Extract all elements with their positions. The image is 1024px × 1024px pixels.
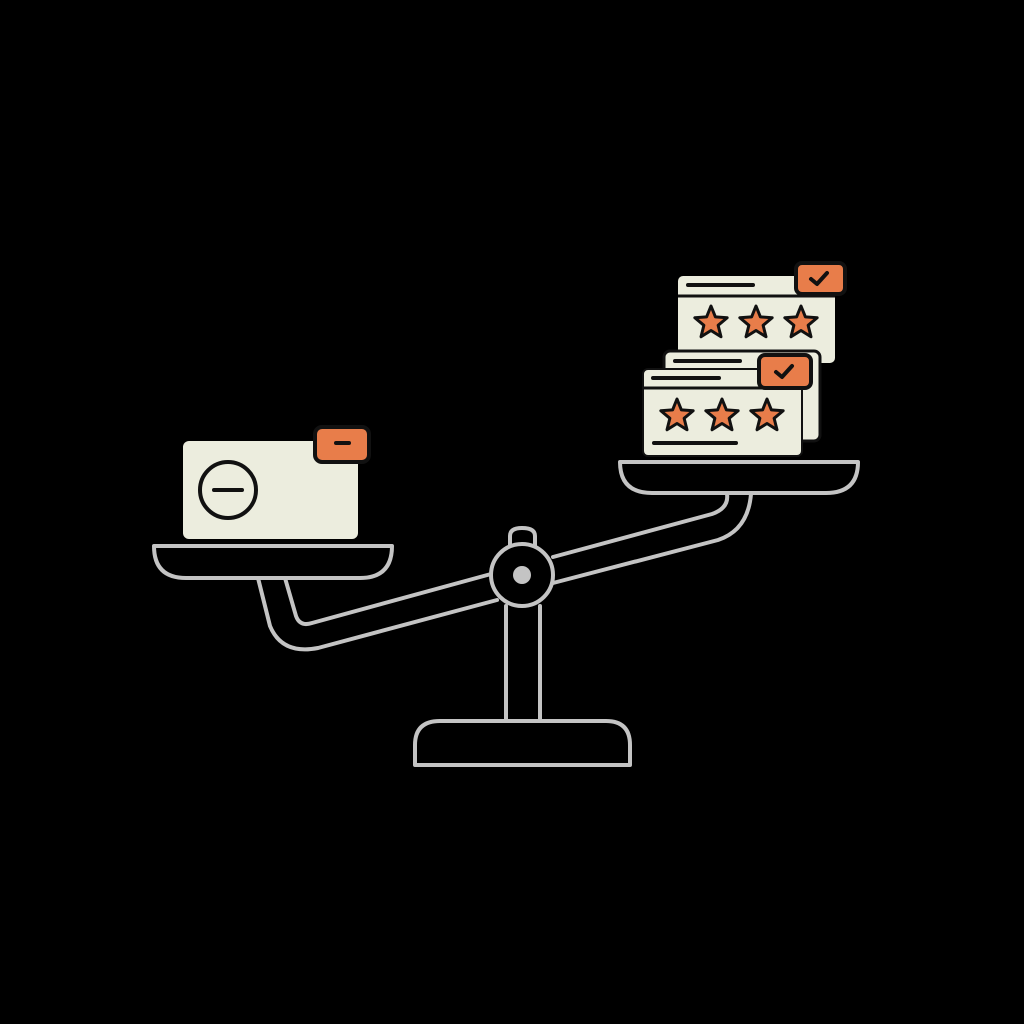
card: front review bbox=[643, 355, 811, 456]
right cards: positive reviews bbox=[643, 263, 845, 456]
card: top review bbox=[678, 263, 845, 363]
base bbox=[415, 721, 630, 765]
tab: minus bbox=[315, 427, 369, 462]
post bbox=[506, 606, 540, 721]
beam right arm bbox=[553, 494, 751, 583]
scale: balance bbox=[154, 462, 858, 765]
pivot loop bbox=[510, 528, 535, 546]
pivot bbox=[491, 544, 553, 606]
left card: negative bbox=[183, 427, 369, 539]
left pan bbox=[154, 546, 392, 578]
beam left arm bbox=[258, 574, 497, 649]
card: middle review bbox=[664, 351, 820, 441]
right pan bbox=[620, 462, 858, 493]
icon: minus circle bbox=[200, 462, 256, 518]
